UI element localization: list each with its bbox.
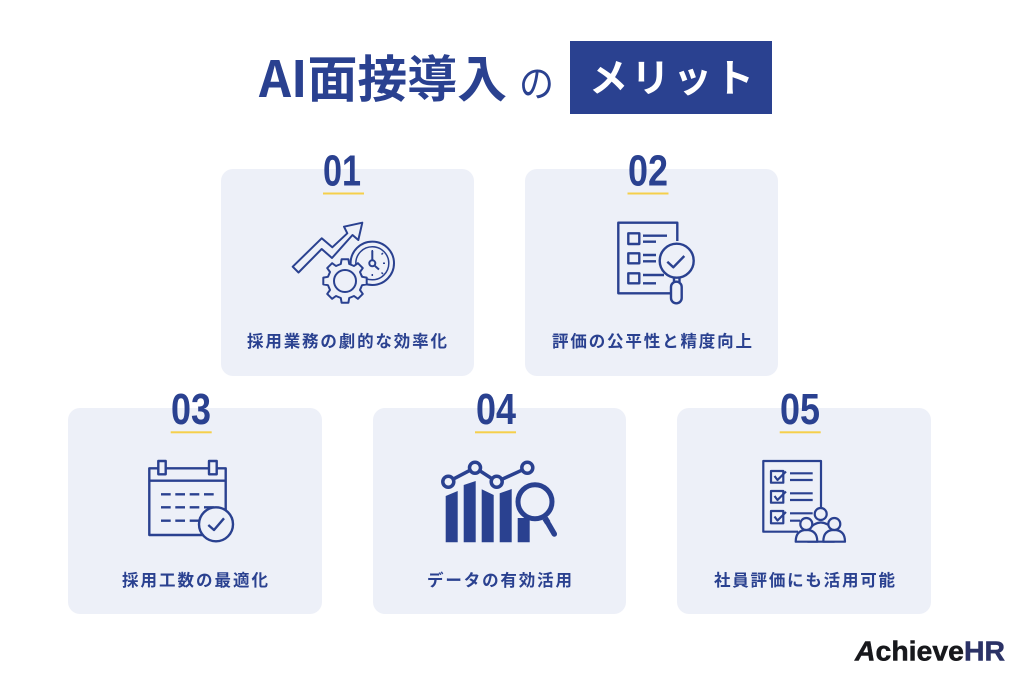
title highlight box xyxy=(570,41,772,114)
title xyxy=(258,40,772,114)
panel: 01 xyxy=(221,146,474,376)
number 01: 01 xyxy=(323,146,361,196)
label: 評価の公平性と精度向上 xyxy=(552,328,752,352)
icon: checklist and people xyxy=(763,461,845,542)
title main text: AI面接導入 xyxy=(258,40,507,112)
number 05: 05 xyxy=(780,385,820,434)
icon: growth arrow, clock and gear xyxy=(293,223,394,303)
label: 社員評価にも活用可能 xyxy=(714,567,896,591)
icon: calendar with check xyxy=(149,461,233,541)
label: データの有効活用 xyxy=(427,567,572,591)
icon: data chart and magnifier xyxy=(443,462,554,542)
panel: 04 xyxy=(373,385,626,614)
panel: 02 xyxy=(525,146,778,376)
title highlight box: メリット xyxy=(589,48,754,104)
label: 採用業務の劇的な効率化 xyxy=(247,328,448,352)
number 02: 02 xyxy=(628,146,668,196)
panel: 05 xyxy=(677,385,931,614)
number 03: 03 xyxy=(171,385,211,434)
icon: checklist and magnifier xyxy=(618,223,694,303)
panel: 03 xyxy=(68,385,322,614)
title particle: の xyxy=(519,53,554,108)
logo: AchieveHR xyxy=(854,636,1005,666)
label: 採用工数の最適化 xyxy=(122,567,268,591)
number 04: 04 xyxy=(476,385,516,434)
